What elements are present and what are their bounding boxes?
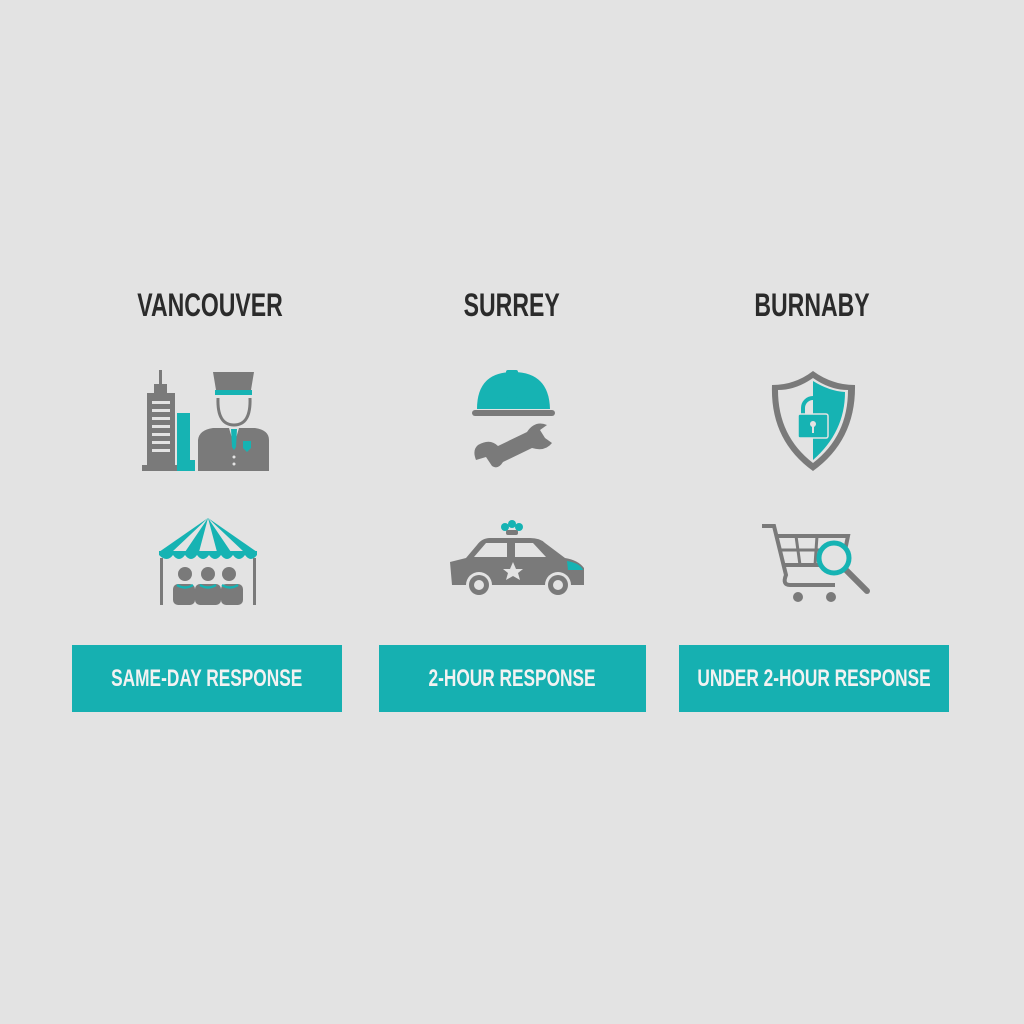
button: same-day response: SAME-DAY RESPONSE xyxy=(111,664,303,692)
icon: police officer xyxy=(198,372,269,471)
button: same-day response xyxy=(72,645,342,712)
title: Vancouver: VANCOUVER xyxy=(137,287,283,323)
icon: shopping cart with magnifier xyxy=(762,526,867,602)
icon: hard hat and wrench xyxy=(472,370,555,467)
title: Burnaby: BURNABY xyxy=(754,287,870,323)
button: 2-hour response xyxy=(379,645,646,712)
button: under 2-hour response xyxy=(679,645,949,712)
button: 2-hour response: 2-HOUR RESPONSE xyxy=(429,664,596,692)
icon: market tent with people xyxy=(159,518,257,605)
icon: police car xyxy=(450,520,584,598)
icon: security shield with padlock xyxy=(772,371,855,471)
title: Surrey: SURREY xyxy=(464,287,560,323)
icon: buildings xyxy=(142,370,195,471)
button: under 2-hour response: UNDER 2-HOUR RESPONSE xyxy=(697,664,931,692)
